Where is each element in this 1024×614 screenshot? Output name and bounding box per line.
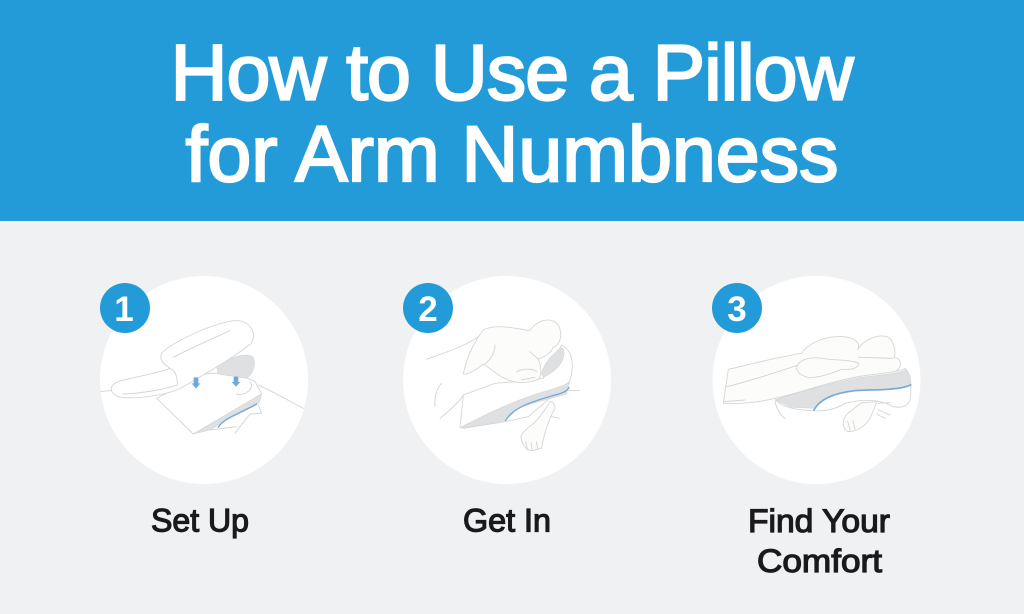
- illustration: wedge pillow set up: [101, 321, 303, 434]
- caption: find your comfort: Find Your: [748, 503, 890, 539]
- number badge 2: [403, 283, 453, 333]
- number badge 3: [712, 283, 762, 333]
- illustration: person getting onto wedge: [427, 320, 580, 451]
- title: for Arm Numbness: [186, 109, 838, 198]
- number badge 2: 2: [418, 290, 438, 329]
- caption: find your comfort: Comfort: [757, 543, 882, 579]
- illustration circle 3: [712, 276, 920, 484]
- illustration circle 1: [100, 276, 308, 484]
- illustration circle 2: [403, 276, 611, 484]
- panel: step 3 find your comfort: [712, 276, 920, 579]
- caption: find your comfort: [748, 503, 890, 579]
- panel: step 2 get in: [403, 276, 611, 538]
- number badge 1: [100, 283, 150, 333]
- caption: get in: Get In: [463, 502, 551, 538]
- header band: [0, 0, 1024, 221]
- illustration: person resting on wedge: [723, 336, 911, 432]
- number badge 1: 1: [114, 290, 134, 329]
- panel: step 1 set up: [100, 276, 308, 538]
- caption: set up: Set Up: [151, 502, 249, 538]
- title: How to Use a Pillow: [170, 28, 854, 116]
- icon: down arrows: [192, 377, 240, 389]
- title: [170, 28, 854, 198]
- number badge 3: 3: [727, 290, 747, 329]
